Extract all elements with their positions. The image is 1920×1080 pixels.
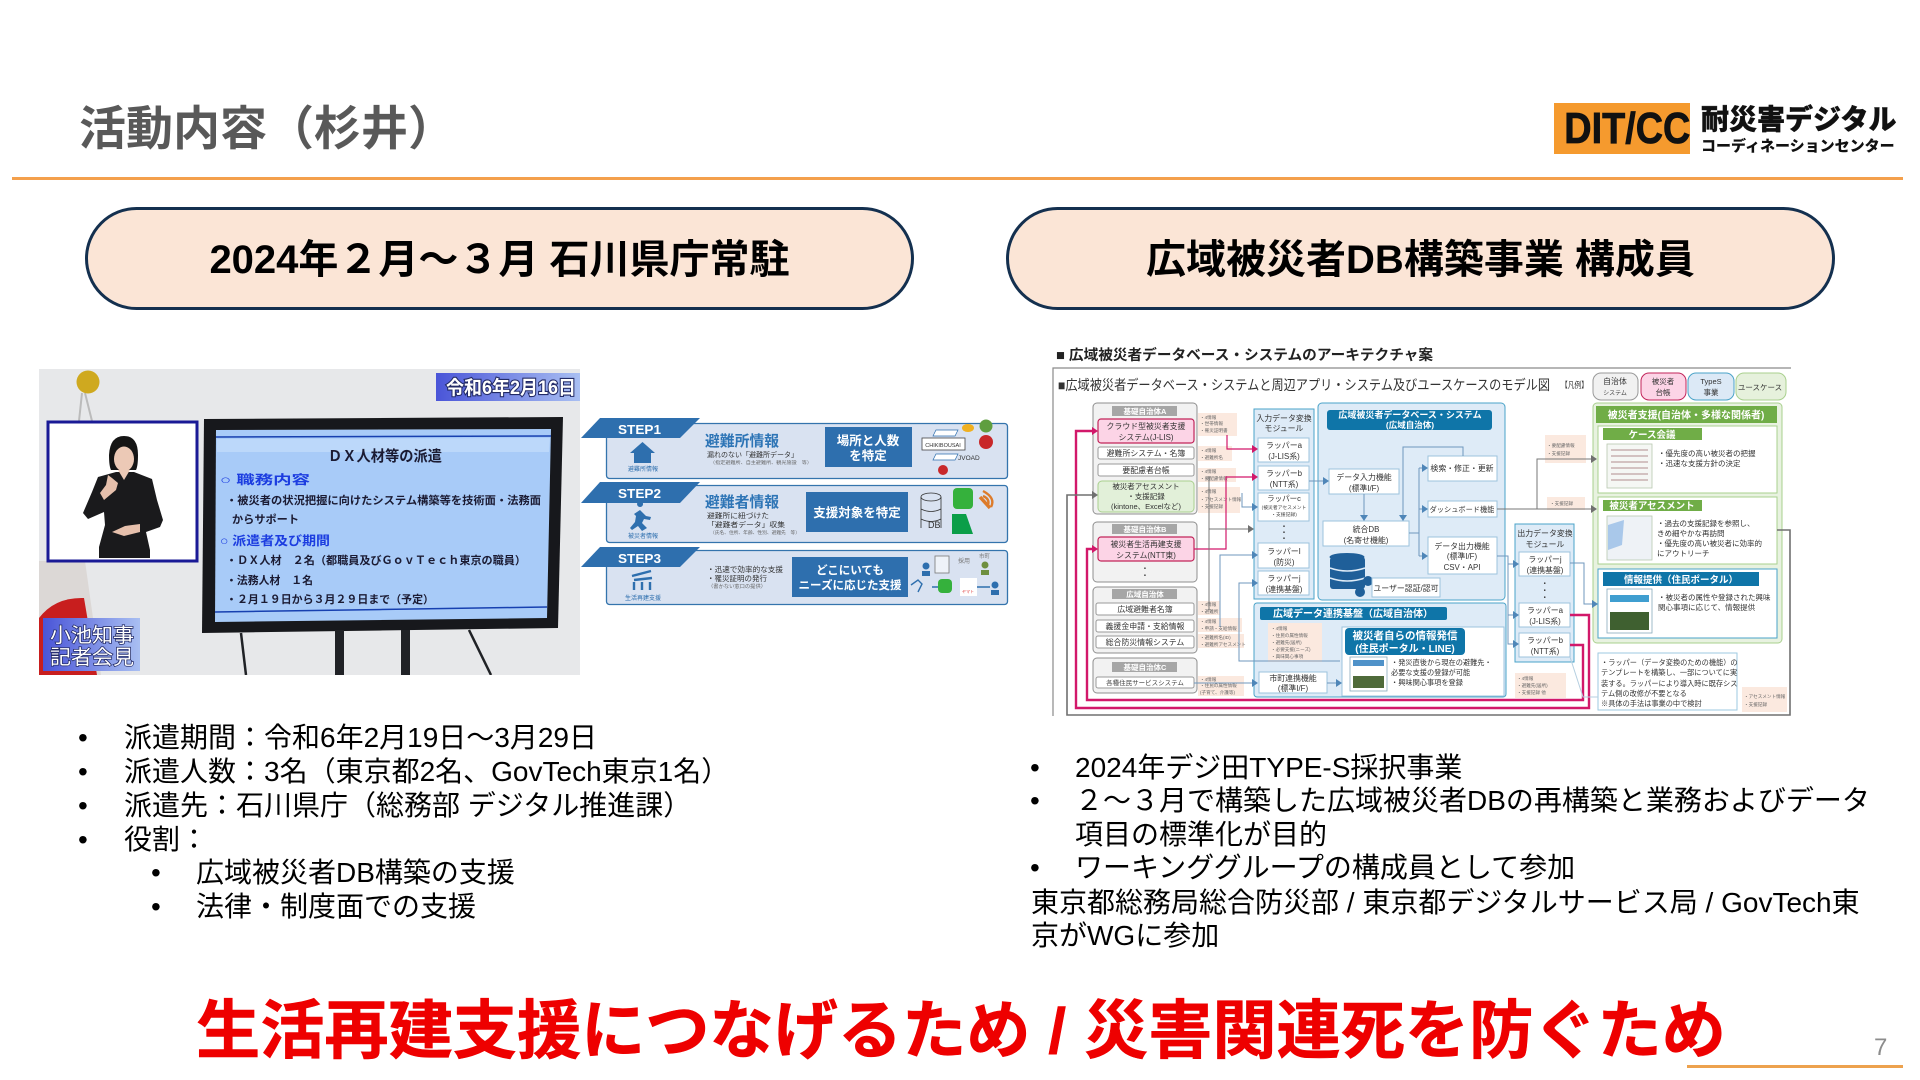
wrapper note: テム側の改修が不要となる (1601, 689, 1687, 698)
panel: input conversion module: 入力データ変換 (1256, 413, 1312, 423)
page number: 7 (1874, 1034, 1887, 1061)
data notes: ・支援記録 他 (1517, 689, 1546, 696)
panel: output conversion module: ラッパーb (1527, 636, 1564, 645)
monitor text: ○ 派遣者及び期間 (220, 533, 330, 548)
panel: output conversion module: (連携基盤) (1527, 565, 1564, 575)
step 1: 漏れのない「避難所データ」 (707, 450, 798, 459)
panel: municipality C: 基礎自治体C (1124, 662, 1167, 672)
legend: 自治体 (1603, 376, 1627, 386)
legend: TypeS (1700, 377, 1722, 386)
panel: regional victim database system: (標準I/F) (1349, 483, 1379, 493)
diagram heading: ■ 広域被災者データベース・システムのアーキテクチャ案 (1056, 346, 1434, 364)
assessment (1598, 497, 1777, 564)
data notes: ・住民の属性情報 (1200, 682, 1237, 689)
panel: prefecture: 義援金申請・支給情報 (1106, 621, 1185, 631)
left bullet list: • (151, 857, 161, 888)
panel: input conversion module: ラッパーj (1267, 574, 1301, 583)
panel: regional data linkage: ・興味関心事項 (1271, 653, 1304, 660)
speaker caption (43, 618, 140, 671)
panel: output conversion module: ・ (1541, 579, 1548, 588)
panel: municipality A: 基礎自治体A (1124, 406, 1167, 416)
legend (1561, 373, 1786, 400)
right bullet list (1030, 752, 1870, 951)
panel: municipality A: 要配慮者台帳 (1122, 465, 1170, 475)
data notes: ・4情報 (1200, 414, 1217, 421)
panel: regional victim database system: (名寄せ機能) (1344, 535, 1389, 545)
monitor text: からサポート (232, 513, 299, 526)
panel: victim support (1593, 403, 1782, 643)
right bullet list: 東京都総務局総合防災部 / 東京都デジタルサービス局 / GovTech東 (1031, 887, 1860, 918)
step 3: ・迅速で効率的な支援 (707, 564, 784, 574)
data notes: ・支援記録 (1550, 500, 1573, 507)
panel: prefecture (1093, 587, 1197, 653)
legend: 被災者 (1652, 376, 1675, 386)
step 3: 生活再建支援 (625, 594, 661, 602)
panel: input conversion module (1254, 409, 1314, 599)
monitor text: ・被災者の状況把握に向けたシステム構築等を技術面・法務面 (226, 493, 541, 507)
panel: municipality A: システム(J-LIS) (1118, 433, 1174, 442)
left bullet list: • (78, 790, 88, 821)
step 1: JVOAD (958, 455, 980, 462)
step 1: 避難所情報 (628, 465, 658, 473)
panel: regional victim database system: (標準I/F) (1447, 551, 1477, 561)
case conference: ・優先度の高い被災者の把握 (1658, 448, 1756, 458)
right bullet list: • (1030, 852, 1040, 883)
left bullet list: 役割： (124, 824, 208, 855)
monitor (202, 417, 563, 675)
right bullet list: 京がWGに参加 (1031, 920, 1219, 951)
right bullet list: • (1030, 785, 1040, 816)
panel: municipality C (1093, 658, 1197, 693)
step 3: ニーズに応じた支援 (799, 578, 902, 592)
panel: municipality A: 被災者アセスメント (1112, 481, 1180, 491)
gold ball (76, 370, 100, 394)
panel: regional data linkage: 必要な支援の登録が可能 (1391, 668, 1470, 677)
step 1 (581, 418, 1008, 478)
conclusion message: 生活再建支援につなげるため / 災害関連死を防ぐため (196, 995, 1726, 1067)
step 1: を特定 (849, 448, 887, 463)
right heading pill: 広域被災者DB構築事業 構成員 (1146, 238, 1695, 282)
step 2: 被災者情報 (628, 532, 658, 540)
assessment: にアウトリーチ (1657, 549, 1710, 558)
panel: regional victim database system: ダッシュボード機能 (1430, 505, 1494, 514)
panel: municipality A: (kintone、Excelなど) (1111, 502, 1182, 511)
wrapper note: テンプレートを構築し、一部についてに実 (1601, 668, 1737, 677)
step 2: DB (928, 520, 941, 530)
panel: municipality B: システム(NTT東) (1116, 550, 1176, 560)
panel: regional victim database system: ユーザー認証/認可 (1373, 584, 1439, 593)
panel: input conversion module: ・ (1280, 528, 1288, 537)
panel: municipality B: 基礎自治体B (1124, 524, 1167, 534)
speaker caption: 記者会見 (50, 646, 134, 669)
panel: input conversion module: モジュール (1265, 424, 1304, 433)
panel: output conversion module: ・ (1541, 593, 1548, 602)
data notes: ・4情報 (1200, 447, 1217, 454)
right bullet list: • (1030, 752, 1040, 783)
left bullet list: • (151, 891, 161, 922)
assessment: ・過去の支援記録を参照し、 (1657, 518, 1754, 528)
panel: output conversion module: ・ (1541, 586, 1548, 595)
step 2: 避難者情報 (705, 493, 779, 511)
panel: input conversion module: (J-LIS系) (1268, 451, 1300, 461)
panel: municipality A: 避難所システム・名簿 (1107, 448, 1185, 458)
step 1: 場所と人数 (837, 433, 900, 448)
panel: municipality B: 被災者生活再建支援 (1110, 539, 1182, 549)
step 2: 避難所に紐づけた (707, 511, 769, 520)
right bullet list: 項目の標準化が目的 (1075, 819, 1327, 850)
data notes: ・要配慮情報 (1200, 475, 1228, 482)
monitor text: ・ＤＸ人材 ２名（都職員及びＧｏｖＴｅｃｈ東京の職員） (226, 553, 526, 567)
panel: input conversion module: ラッパーb (1266, 469, 1303, 478)
case conference (1598, 426, 1777, 493)
data notes: ・避難所名 (1200, 454, 1223, 461)
panel: regional victim database system: データ出力機能 (1434, 541, 1490, 551)
left bullet list: 派遣期間：令和6年2月19日～3月29日 (124, 722, 597, 753)
left heading pill (85, 207, 914, 310)
panel: municipality A: ・支援記録 (1127, 491, 1165, 501)
wrapper note: ・ラッパー（データ変換のための機能）の (1601, 658, 1738, 667)
panel: regional data linkage: ・必要支援(ニーズ) (1271, 646, 1311, 653)
right bullet list: ワーキンググループの構成員として参加 (1075, 852, 1575, 883)
panel: regional data linkage: 被災者自らの情報発信 (1352, 629, 1458, 642)
panel: regional data linkage: ・発災直後から現在の避難先・ (1391, 658, 1492, 667)
panel: input conversion module: ラッパーc (1267, 494, 1301, 503)
step 3: STEP3 (618, 551, 661, 566)
title: 活動内容（杉井） (79, 102, 455, 155)
panel: municipality B (1093, 522, 1197, 582)
data notes: ・4情報 (1517, 675, 1534, 682)
data notes: ・世帯情報 (1200, 420, 1223, 427)
speaker caption: 小池知事 (50, 624, 134, 647)
data notes: ・避難先(居所) (1517, 682, 1548, 689)
information provision: ・被災者の属性や登録された興味 (1658, 592, 1771, 602)
data notes: ・4情報 (1200, 468, 1217, 475)
case conference: ケース会議 (1628, 429, 1676, 441)
legend: 【凡例】 (1561, 380, 1588, 390)
step 2: （氏名、住所、年齢、性別、避難先 等） (710, 529, 800, 536)
panel: municipality B: ・ (1141, 571, 1149, 580)
panel: regional victim database system: 検索・修正・更新 (1430, 463, 1494, 473)
left bullet list: 法律・制度面での支援 (196, 891, 476, 922)
panel: regional data linkage: (住民ポータル・LINE) (1355, 642, 1455, 655)
panel: input conversion module: ラッパーa (1266, 441, 1303, 450)
data notes: ・4情報 (1200, 488, 1217, 495)
data notes: ・アセスメント情報 (1200, 496, 1242, 503)
panel: input conversion module: (NTT系) (1270, 479, 1299, 489)
panel: prefecture: 総合防災情報システム (1106, 637, 1184, 647)
step 1: STEP1 (618, 422, 661, 437)
step 1: （指定避難所、自主避難所、観光施設 等） (710, 459, 812, 466)
monitor text: ・法務人材 １名 (226, 573, 313, 587)
right heading pill (1006, 207, 1835, 310)
panel: regional data linkage (1254, 603, 1506, 697)
step 2: 支援対象を特定 (813, 505, 901, 520)
step chart (581, 418, 1008, 606)
panel: regional victim database system: 広域被災者データベース・システム (1338, 409, 1482, 420)
panel: regional data linkage: 広域データ連携基盤（広域自治体） (1273, 607, 1433, 620)
data notes: ・4情報 (1200, 601, 1217, 608)
panel: regional data linkage: ・避難先(居所) (1271, 639, 1302, 646)
data notes: ・申請・支給情報 (1200, 625, 1237, 632)
panel: output conversion module: (NTT系) (1531, 646, 1560, 656)
panel: prefecture: 広域避難者名簿 (1117, 604, 1173, 614)
data notes: ・支援記録 (1547, 450, 1570, 457)
data notes: ・要配慮情報 (1547, 442, 1575, 449)
step 3 (581, 547, 1008, 604)
diagram subheading: ■広域被災者データベース・システムと周辺アプリ・システム及びユースケースのモデル図 (1058, 377, 1550, 393)
connector lines (1067, 427, 1790, 715)
right bullet list: 2024年デジ田TYPE-S採択事業 (1075, 752, 1462, 783)
panel: output conversion module: 出力データ変換 (1517, 528, 1573, 538)
panel: input conversion module: ・ (1280, 522, 1288, 531)
panel: output conversion module: モジュール (1526, 540, 1565, 549)
panel: input conversion module: (防災) (1273, 557, 1295, 567)
legend: ユースケース (1738, 383, 1782, 392)
left heading pill: 2024年２月～３月 石川県庁常駐 (209, 238, 790, 282)
panel: regional victim database system: CSV・API (1444, 563, 1480, 572)
panel: output conversion module: ラッパーa (1527, 606, 1564, 615)
data notes: ・4情報 (1200, 618, 1217, 625)
panel: input conversion module: ・ (1280, 534, 1288, 543)
panel: regional victim database system: データ入力機能 (1336, 472, 1392, 482)
step 1: 避難所情報 (705, 432, 779, 450)
panel: output conversion module: ラッパーj (1528, 555, 1562, 564)
panel: regional victim database system (1318, 403, 1505, 600)
data notes: ・罹災証明書 (1200, 427, 1228, 434)
panel: regional victim database system: (広域自治体) (1386, 420, 1434, 430)
panel: output conversion module: (J-LIS系) (1529, 616, 1561, 626)
data notes: ・支援記録 (1200, 503, 1223, 510)
information provision (1598, 569, 1777, 638)
panel: municipality B: ・ (1141, 564, 1149, 573)
panel: output conversion module (1515, 524, 1574, 662)
monitor text (220, 447, 541, 606)
sign language inset (48, 422, 197, 561)
monitor text: ○ 職務内容 (220, 472, 311, 487)
legend: 事業 (1704, 387, 1719, 397)
left bullet list: • (78, 756, 88, 787)
step 3: 市町 (979, 552, 991, 560)
panel: regional data linkage: ・興味関心事項を登録 (1391, 678, 1464, 687)
step 3: 採用 (958, 557, 970, 565)
wrapper note: ※具体の手法は事業の中で検討 (1601, 699, 1702, 708)
wrapper note (1598, 653, 1738, 710)
logo name: 耐災害デジタル (1701, 104, 1896, 135)
right bullet list: ２～３月で構築した広域被災者DBの再構築と業務およびデータ (1075, 785, 1870, 816)
panel: regional victim database system: 統合DB (1353, 524, 1379, 534)
panel: regional data linkage: ・4情報 (1271, 625, 1288, 632)
step 3: ヤマト (962, 589, 974, 594)
step 3: （書かない窓口の提供） (708, 583, 766, 590)
panel: regional data linkage: 市町連携機能 (1269, 673, 1317, 683)
data notes (1198, 413, 1787, 712)
step 2 (581, 482, 1008, 542)
icon: database (1330, 553, 1373, 597)
monitor text: ・２月１９日から３月２９日まで（予定） (226, 593, 434, 606)
assessment: きめ細やかな再訪問 (1657, 528, 1724, 538)
architecture diagram (1052, 346, 1791, 716)
data notes: ・避難所名(ID) (1200, 634, 1231, 641)
left bullet list: • (78, 824, 88, 855)
legend: システム (1603, 390, 1627, 397)
step 3: ・罹災証明の発行 (707, 573, 767, 583)
step 3: どこにいても (816, 563, 884, 577)
left bullet list: 広域被災者DB構築の支援 (196, 857, 515, 888)
step 2: 「避難者データ」収集 (707, 520, 785, 529)
photo: press conference (39, 369, 580, 675)
left bullet list (78, 722, 729, 922)
logo subtitle: コーディネーションセンター (1701, 138, 1895, 155)
legend: 台帳 (1656, 387, 1671, 397)
panel: input conversion module: (被災者アセスメント (1262, 504, 1307, 511)
assessment: 被災者アセスメント (1609, 500, 1695, 512)
information provision: 情報提供（住民ポータル） (1624, 574, 1738, 586)
panel: input conversion module: ラッパーI (1267, 547, 1301, 556)
panel: regional data linkage: ・住民の属性情報 (1271, 632, 1308, 639)
data notes: ・支援記録 (1744, 701, 1767, 708)
panel: prefecture: 広域自治体 (1126, 589, 1164, 599)
panel: municipality A: クラウド型被災者支援 (1107, 421, 1186, 431)
monitor text: ＤＸ人材等の派遣 (328, 447, 442, 465)
date caption: 令和6年2月16日 (446, 376, 576, 399)
case conference: ・迅速な支援方針の決定 (1658, 458, 1741, 468)
panel: municipality A (1093, 403, 1197, 514)
panel: input conversion module: ・支援記録) (1271, 511, 1297, 518)
flag (39, 561, 101, 675)
data notes: (子育て、介護等) (1200, 689, 1235, 696)
data notes: ・避難所アセスメント (1200, 641, 1246, 648)
panel: regional data linkage: (標準I/F) (1278, 683, 1308, 693)
data notes: ・避難所 (1200, 608, 1219, 615)
step 1: CHIKIBOUSAI (925, 443, 961, 449)
data notes: ・アセスメント情報 (1744, 693, 1786, 700)
left bullet list: 派遣人数：3名（東京都2名、GovTech東京1名） (124, 756, 729, 787)
information provision: 関心事項に応じて、情報提供 (1658, 602, 1756, 612)
panel: victim support: 被災者支援(自治体・多様な関係者) (1608, 408, 1764, 422)
logo (1554, 103, 1896, 155)
left bullet list: 派遣先：石川県庁（総務部 デジタル推進課） (124, 790, 691, 821)
panel: municipality C: 各種住民サービスシステム (1106, 678, 1184, 687)
logo mark: DIT/CC (1564, 104, 1690, 153)
date caption (436, 373, 580, 401)
data notes: ・4情報 (1200, 676, 1217, 683)
assessment: ・優先度の高い被災者に効率的 (1657, 538, 1762, 548)
wrapper note: 装する。ラッパーにより導入時に既存シス (1601, 679, 1737, 688)
left bullet list: • (78, 722, 88, 753)
step 2: STEP2 (618, 486, 661, 501)
panel: input conversion module: (連携基盤) (1266, 584, 1303, 594)
